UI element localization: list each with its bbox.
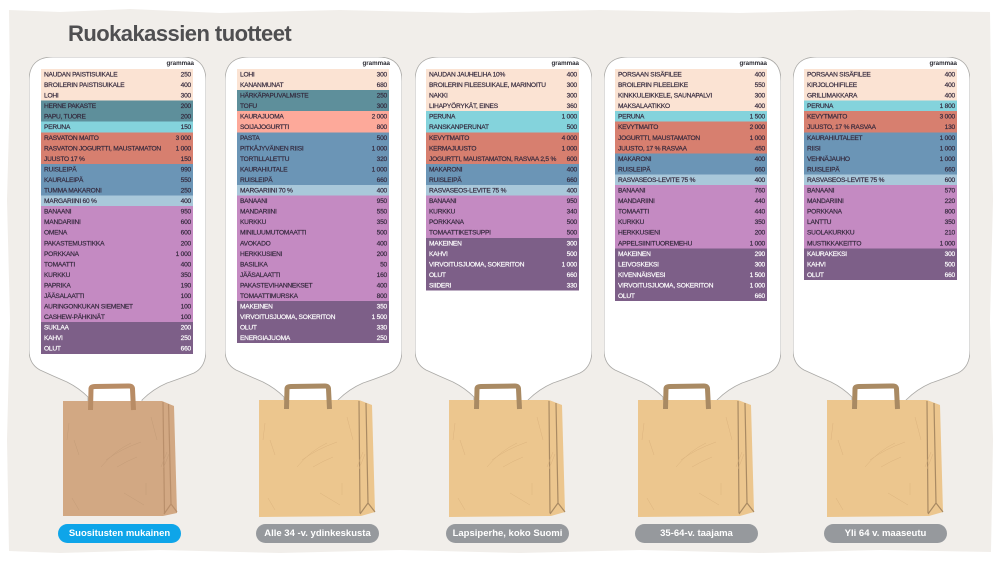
group: fruit and vegetables: 400 (377, 281, 387, 289)
group: legumes: TOFU (240, 102, 257, 110)
unit label: grammaa (739, 60, 767, 67)
group: dairy: JUUSTO, 17 % RASVAA (807, 123, 876, 131)
group: treats and drinks: 1 000 (562, 260, 577, 268)
group: grains: 1 000 (372, 144, 387, 152)
unit label: grammaa (929, 60, 957, 67)
group: grains (804, 132, 957, 174)
group: fruit and vegetables: 440 (755, 197, 765, 205)
group: fruit and vegetables (41, 206, 193, 322)
group: dairy: 4 000 (562, 134, 577, 141)
label pill: Alle 34 -v. ydinkeskusta (264, 528, 371, 539)
group: treats and drinks: VIRVOITUSJUOMA, SOKERITON (429, 260, 524, 268)
group: meat and fish: PORSAAN SISÄFILEE (807, 70, 871, 78)
group: treats and drinks: 300 (567, 239, 577, 247)
group: fruit and vegetables: 500 (567, 229, 577, 236)
group: fruit and vegetables: 210 (945, 229, 955, 236)
illustration: speech bubble and paper bag (604, 57, 781, 517)
group: fruit and vegetables: PAPRIKA (44, 281, 71, 289)
illustration: speech bubble and paper bag (225, 57, 402, 517)
group: dairy: KEVYTMAITO (807, 113, 847, 120)
group: treats and drinks: LEIVOSKEKSI (618, 260, 659, 268)
group: fats: 600 (945, 176, 955, 183)
group: fruit and vegetables: APPELSIINITUOREMEHU (618, 239, 692, 247)
group: treats and drinks: 250 (377, 334, 387, 342)
group: fruit and vegetables: BANAANI (618, 187, 645, 194)
group: meat: 300 (567, 92, 577, 99)
group: fruit and vegetables: TOMAATTIKETSUPPI (429, 229, 491, 236)
group: fats: 400 (755, 176, 765, 183)
group: treats and drinks (804, 248, 957, 280)
group: fats (804, 174, 957, 185)
group: treats and drinks: 290 (755, 250, 765, 257)
group: dairy: JOGURTTI, MAUSTAMATON (618, 134, 700, 141)
group: fats: MARGARIINI 60 % (44, 197, 97, 205)
group: treats and drinks: ENERGIAJUOMA (240, 334, 290, 342)
panel: Yli 64 v. maaseutu (793, 57, 970, 543)
group: dairy: 1 000 (562, 144, 577, 152)
group: fruit and vegetables: 160 (377, 271, 387, 278)
group: grains: RUISLEIPÄ (618, 165, 650, 173)
group: dairy (426, 132, 579, 164)
group: meat and fish: 400 (181, 81, 191, 89)
group: legumes: PAPU, TUORE (44, 113, 86, 120)
group: fruit and vegetables: 50 (380, 260, 387, 268)
group: treats and drinks: MAKEINEN (429, 239, 462, 247)
group: fruit and vegetables: 200 (181, 239, 191, 247)
group: fruit and vegetables: AURINGONKUKAN SIEMENET (44, 303, 133, 310)
group: grains: RIISI (807, 144, 821, 152)
group: meat: 400 (755, 102, 765, 110)
group: meat and fish: 300 (181, 92, 191, 99)
group: grains: TUMMA MAKARONI (44, 187, 102, 194)
group: meat (426, 69, 579, 111)
group: grains: MAKARONI (618, 155, 651, 162)
group: treats and drinks (237, 301, 389, 343)
group: treats and drinks: SIIDERI (429, 281, 451, 289)
group: fruit and vegetables: TOMAATTIMURSKA (240, 292, 298, 299)
group: legumes: HERNE PAKASTE (44, 102, 96, 110)
group: fruit and vegetables: MINILUUMUTOMAATTI (240, 229, 306, 236)
group: fruit and vegetables: 760 (755, 187, 765, 194)
group: fruit and vegetables: TOMAATTI (618, 208, 649, 215)
group: fruit and vegetables: 950 (181, 208, 191, 215)
group: treats and drinks: 660 (181, 345, 191, 352)
group: fruit and vegetables: 200 (755, 229, 765, 236)
group: fats (615, 174, 767, 185)
group: meat and fish: 400 (945, 81, 955, 89)
group: treats and drinks: 1 500 (372, 313, 387, 321)
group: dairy: 450 (755, 144, 765, 152)
group: meat and eggs: KANANMUNAT (240, 81, 283, 89)
label pill (824, 524, 947, 543)
group: treats and drinks: KAHVI (807, 260, 826, 268)
group: fruit and vegetables: 950 (377, 197, 387, 205)
group: fruit and vegetables: KURKKU (429, 208, 455, 215)
unit label: grammaa (551, 60, 579, 67)
group: fruit and vegetables: PORKKANA (429, 218, 464, 226)
group: treats and drinks (615, 248, 767, 301)
group: dairy (804, 111, 957, 132)
group: treats and drinks: 330 (377, 324, 387, 331)
group: potato: 1 000 (562, 113, 577, 120)
group: fruit and vegetables: MANDARIINI (618, 197, 655, 205)
group: meat and fish: BROILERIN PAISTISUIKALE (44, 81, 124, 89)
panel: Lapsiperhe, koko Suomi (415, 57, 592, 543)
group: grains: TORTILLALETTU (240, 155, 289, 162)
group: fruit and vegetables: CASHEW-PÄHKINÄT (44, 313, 105, 321)
group: meat: BROILERIN FILEELEIKE (618, 81, 688, 89)
panel: Suositusten mukainen (29, 57, 206, 543)
group: fruit and vegetables: KURKKU (618, 218, 644, 226)
group: fruit and vegetables: 1 000 (750, 239, 765, 247)
group: treats and drinks: KAURAKEKSI (807, 250, 847, 257)
group: potato: PERUNA (44, 123, 70, 131)
group: legumes (237, 90, 389, 111)
group: fruit and vegetables: 600 (181, 229, 191, 236)
group: fats: MARGARIINI 70 % (240, 187, 293, 194)
group: treats and drinks: VIRVOITUSJUOMA, SOKERITON (240, 313, 335, 321)
group: fruit and vegetables: 220 (945, 197, 955, 205)
group: grains: RUISLEIPÄ (240, 176, 272, 183)
label pill: 35-64-v. taajama (660, 528, 733, 539)
group: grains: 1 000 (372, 165, 387, 173)
group: meat (615, 69, 767, 111)
group: fruit and vegetables: AVOKADO (240, 239, 271, 247)
group: fruit and vegetables: 350 (945, 218, 955, 226)
group: fruit and vegetables: MANDARIINI (807, 197, 844, 205)
group: fats: RASVASEOS-LEVITE 75 % (429, 187, 506, 194)
group: fruit and vegetables: SUOLAKURKKU (807, 229, 854, 236)
group: fruit and vegetables (237, 196, 389, 301)
group: treats and drinks: VIRVOITUSJUOMA, SOKERITON (618, 281, 713, 289)
group: potato (804, 101, 957, 111)
group: grains: 1 000 (940, 134, 955, 141)
group: grains: PASTA (240, 134, 260, 141)
group: grains: 660 (567, 176, 577, 183)
group: fats: 400 (567, 187, 577, 194)
label pill: Suositusten mukainen (69, 528, 170, 539)
group: fruit and vegetables: MANDARIINI (240, 208, 277, 215)
illustration: speech bubble and paper bag (793, 57, 970, 517)
group: potato: PERUNA (807, 102, 833, 110)
label pill (635, 524, 758, 543)
label pill: Yli 64 v. maaseutu (845, 528, 926, 539)
group: meat: MAKSALAATIKKO (618, 102, 670, 110)
group: plant dairy: 800 (377, 123, 387, 131)
group: fruit and vegetables: BANAANI (807, 187, 834, 194)
group: fruit and vegetables (804, 185, 957, 248)
group: fruit and vegetables: KURKKU (240, 218, 266, 226)
group: fruit and vegetables: 350 (181, 271, 191, 278)
group: legumes: 300 (377, 102, 387, 110)
group: treats and drinks: KIVENNÄISVESI (618, 271, 665, 278)
group: grains: VEHNÄJAUHO (807, 155, 850, 162)
group: grains: KAURALEIPÄ (44, 176, 83, 183)
group: fruit and vegetables: 100 (181, 313, 191, 321)
group: meat and fish: 250 (181, 70, 191, 78)
group: fruit and vegetables: 440 (755, 208, 765, 215)
group: meat and fish: 400 (945, 92, 955, 99)
group: potato (426, 111, 579, 132)
group: grains: 990 (181, 165, 191, 173)
group: fruit and vegetables: 800 (377, 292, 387, 299)
group: treats and drinks (41, 322, 193, 354)
group: meat: BROILERIN FILEESUIKALE, MARINOITU (429, 81, 546, 89)
group: dairy: 1 000 (750, 134, 765, 141)
group: dairy: 150 (181, 155, 191, 162)
group: meat: 300 (567, 81, 577, 89)
group: dairy: JUUSTO 17 % (44, 155, 85, 162)
group: meat and eggs: 680 (377, 81, 387, 89)
group: treats and drinks: 500 (567, 250, 577, 257)
group: legumes: HÄRKÄPAPUVALMISTE (240, 92, 308, 99)
group: fruit and vegetables: 350 (755, 218, 765, 226)
group: legumes: 200 (181, 113, 191, 120)
group: grains: 1 000 (940, 144, 955, 152)
group: meat and eggs: LOHI (240, 70, 254, 78)
group: meat: NAUDAN JAUHELIHA 10% (429, 70, 505, 78)
group: fruit and vegetables: BASILIKA (240, 260, 268, 268)
group: fruit and vegetables: 100 (181, 303, 191, 310)
group: plant dairy (237, 111, 389, 132)
label pill (256, 524, 379, 543)
group: grains: 500 (377, 134, 387, 141)
group: dairy: 130 (945, 123, 955, 131)
group: grains (237, 132, 389, 185)
group: fats: RASVASEOS-LEVITE 75 % (618, 176, 695, 183)
group: legumes: 250 (377, 92, 387, 99)
group: fats: 400 (181, 197, 191, 205)
table: products (804, 69, 957, 280)
group: dairy: JOGURTTI, MAUSTAMATON, RASVAA 2,5 % (429, 155, 556, 162)
group: fruit and vegetables: LANTTU (807, 218, 831, 226)
label pill (446, 524, 569, 543)
group: fruit and vegetables: 350 (377, 218, 387, 226)
group: fruit and vegetables: 400 (181, 260, 191, 268)
group: legumes: 200 (181, 102, 191, 110)
group: meat and fish (41, 69, 193, 101)
group: plant dairy: KAURAJUOMA (240, 113, 284, 120)
label pill: Lapsiperhe, koko Suomi (453, 528, 562, 539)
group: treats and drinks: OLUT (618, 292, 635, 299)
group: meat: PORSAAN SISÄFILEE (618, 70, 682, 78)
group: meat and eggs (237, 69, 389, 90)
unit label: grammaa (166, 60, 194, 67)
group: meat: 300 (755, 92, 765, 99)
group: fruit and vegetables: 200 (377, 250, 387, 257)
group: grains (41, 164, 193, 196)
group: grains: 1 000 (940, 155, 955, 162)
group: dairy (41, 132, 193, 164)
group: fruit and vegetables: HERKKUSIENI (240, 250, 282, 257)
group: dairy: 3 000 (176, 134, 191, 141)
group: grains: KAURAHIUTALE (240, 165, 287, 173)
group: treats and drinks: OLUT (807, 271, 824, 278)
group: fruit and vegetables: 500 (567, 218, 577, 226)
group: grains: KAURAHIUTALEET (807, 134, 862, 141)
group: treats and drinks: 660 (945, 271, 955, 278)
table: products (615, 69, 767, 301)
group: fruit and vegetables: 1 000 (176, 250, 191, 257)
group: fruit and vegetables: PORKKANA (807, 208, 842, 215)
group: fruit and vegetables: MUSTIKKAKEITTO (807, 239, 861, 247)
group: fats: 400 (377, 187, 387, 194)
group: treats and drinks: 200 (181, 324, 191, 331)
group: treats and drinks: 250 (181, 334, 191, 342)
group: treats and drinks: 500 (945, 260, 955, 268)
group: treats and drinks: 1 500 (750, 271, 765, 278)
group: treats and drinks: 300 (755, 260, 765, 268)
panel: Alle 34 -v. ydinkeskusta (225, 57, 402, 543)
group: fruit and vegetables: BANAANI (429, 197, 456, 205)
group: treats and drinks: 330 (567, 281, 577, 289)
group: fruit and vegetables: 500 (377, 229, 387, 236)
group: plant dairy: 2 000 (372, 113, 387, 120)
group: treats and drinks: 660 (567, 271, 577, 278)
group: treats and drinks: OLUT (429, 271, 446, 278)
group: fruit and vegetables: 190 (181, 281, 191, 289)
label pill (58, 524, 181, 543)
group: meat: 550 (755, 81, 765, 89)
group: treats and drinks: 660 (755, 292, 765, 299)
group: potato (615, 111, 767, 122)
group: grains: 660 (755, 165, 765, 173)
group: plant dairy: SOIJAJOGURTTI (240, 123, 289, 131)
group: meat: 360 (567, 102, 577, 110)
group: fruit and vegetables: 570 (945, 187, 955, 194)
group: fruit and vegetables: BANAANI (240, 197, 267, 205)
group: meat and fish (804, 69, 957, 101)
group: meat: 400 (567, 70, 577, 78)
group: potato: PERUNA (429, 113, 455, 120)
panel: 35-64-v. taajama (604, 57, 781, 543)
group: fruit and vegetables: 600 (181, 218, 191, 226)
group: dairy (615, 122, 767, 153)
group: fruit and vegetables (426, 196, 579, 238)
group: grains: 400 (567, 165, 577, 173)
unit label: grammaa (362, 60, 390, 67)
group: meat and fish: GRILLIMAKKARA (807, 92, 857, 99)
group: potato: 500 (567, 123, 577, 131)
group: fruit and vegetables: BANAANI (44, 208, 71, 215)
group: dairy: KERMAJUUSTO (429, 144, 476, 152)
group: fats (237, 185, 389, 196)
group: grains: 400 (755, 155, 765, 162)
group: potato: 1 800 (940, 102, 955, 110)
group: grains: RUISLEIPÄ (429, 176, 461, 183)
group: fruit and vegetables: TOMAATTI (44, 260, 75, 268)
group: grains: 660 (945, 165, 955, 173)
group: potato: 150 (181, 123, 191, 131)
group: grains: RUISLEIPÄ (44, 165, 76, 173)
group: dairy: 3 000 (940, 113, 955, 120)
group: grains: 250 (181, 187, 191, 194)
group: grains: MAKARONI (429, 165, 462, 173)
group: fruit and vegetables: MANDARIINI (44, 218, 81, 226)
group: meat: KINKKULEIKKELE, SAUNAPALVI (618, 92, 712, 99)
group: legumes (41, 101, 193, 122)
group: dairy: KEVYTMAITO (618, 123, 658, 131)
group: meat: LIHAPYÖRYKÄT, EINES (429, 102, 498, 110)
group: fruit and vegetables: JÄÄSALAATTI (44, 292, 84, 299)
group: potato: PERUNA (618, 113, 644, 120)
group: grains (615, 153, 767, 174)
group: meat and fish: NAUDAN PAISTISUIKALE (44, 70, 117, 78)
group: treats and drinks: MAKEINEN (618, 250, 651, 257)
group: meat: NAKKI (429, 92, 448, 99)
group: fats: RASVASEOS-LEVITE 75 % (807, 176, 884, 183)
group: fruit and vegetables: 340 (567, 208, 577, 215)
group: grains: RUISLEIPÄ (807, 165, 839, 173)
group: fruit and vegetables: 800 (945, 208, 955, 215)
illustration: speech bubble and paper bag (415, 57, 592, 517)
group: dairy: 1 000 (176, 144, 191, 152)
group: potato (41, 122, 193, 132)
group: treats and drinks: KAHVI (429, 250, 448, 257)
group: meat and fish: 400 (945, 70, 955, 78)
title: Ruokakassien tuotteet (68, 21, 291, 46)
group: dairy: KEVYTMAITO (429, 134, 469, 141)
group: treats and drinks (426, 238, 579, 290)
group: fats (426, 185, 579, 196)
group: fruit and vegetables: PORKKANA (44, 250, 79, 257)
group: potato: 1 500 (750, 113, 765, 120)
illustration: speech bubble and paper bag (29, 57, 206, 516)
table: products (426, 69, 579, 290)
group: treats and drinks: MAKEINEN (240, 303, 273, 310)
group: grains: 550 (181, 176, 191, 183)
group: fruit and vegetables: 550 (377, 208, 387, 215)
group: meat and fish: KIRJOLOHIFILEE (807, 81, 857, 89)
group: meat and fish: LOHI (44, 92, 58, 99)
group: fruit and vegetables: PAKASTEVIHANNEKSET (240, 281, 312, 289)
group: dairy: JUUSTO, 17 % RASVAA (618, 144, 687, 152)
group: treats and drinks: OLUT (44, 345, 61, 352)
group: meat: 400 (755, 70, 765, 78)
group: treats and drinks: 350 (377, 303, 387, 310)
group: grains (426, 164, 579, 185)
group: meat and eggs: 300 (377, 70, 387, 78)
group: fruit and vegetables: 100 (181, 292, 191, 299)
group: fruit and vegetables: 400 (377, 239, 387, 247)
group: dairy: 600 (567, 155, 577, 162)
group: dairy: RASVATON MAITO (44, 134, 99, 141)
group: treats and drinks: 300 (945, 250, 955, 257)
group: grains: 660 (377, 176, 387, 183)
group: fruit and vegetables: JÄÄSALAATTI (240, 271, 280, 278)
group: treats and drinks: OLUT (240, 324, 257, 331)
group: treats and drinks: KAHVI (44, 334, 63, 342)
group: potato: RANSKANPERUNAT (429, 123, 489, 131)
group: fruit and vegetables: PAKASTEMUSTIKKA (44, 239, 104, 247)
group: fats (41, 196, 193, 206)
group: treats and drinks: SUKLAA (44, 324, 69, 331)
table: products (41, 69, 193, 354)
group: fruit and vegetables (615, 185, 767, 248)
group: fruit and vegetables: HERKKUSIENI (618, 229, 660, 236)
group: dairy: RASVATON JOGURTTI, MAUSTAMATON (44, 144, 161, 152)
group: treats and drinks: 1 000 (750, 281, 765, 289)
group: grains: PITKÄJYVÄINEN RIISI (240, 144, 304, 152)
group: fruit and vegetables: KURKKU (44, 271, 70, 278)
group: fruit and vegetables: OMENA (44, 229, 67, 236)
group: fruit and vegetables: 950 (567, 197, 577, 205)
group: grains: 320 (377, 155, 387, 162)
table: products (237, 69, 389, 343)
group: dairy: 2 000 (750, 123, 765, 131)
group: fruit and vegetables: 1 000 (940, 239, 955, 247)
